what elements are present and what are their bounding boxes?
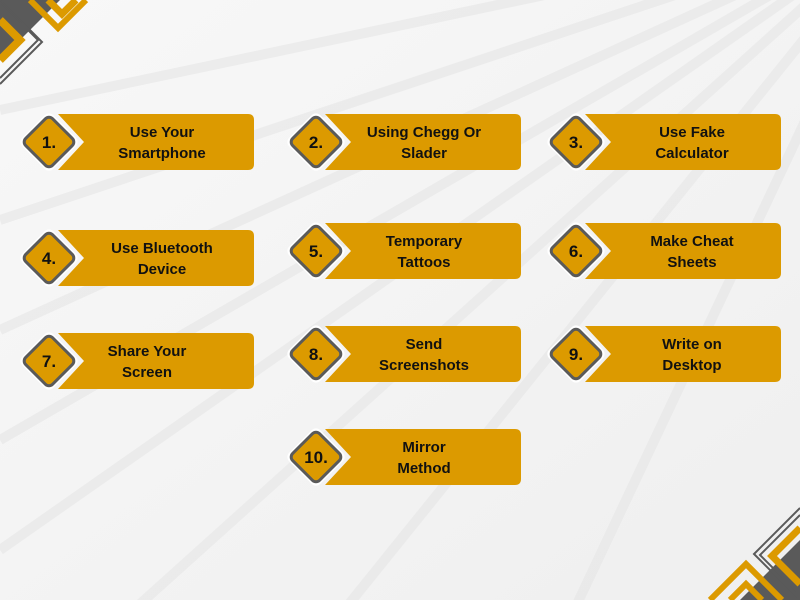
- item 1: [18, 111, 254, 173]
- decoration: bottom-right corner: [710, 508, 800, 600]
- item 9: Write on: [662, 336, 722, 353]
- item 7: [18, 330, 254, 392]
- item 6: Sheets: [667, 254, 717, 271]
- item 2: Using Chegg Or: [367, 124, 481, 141]
- item 1: Use Your: [130, 124, 194, 141]
- item 10: Method: [397, 460, 451, 477]
- item 8: Send: [406, 336, 442, 353]
- item 8: [285, 323, 521, 385]
- item 3: 3.: [569, 133, 583, 152]
- decoration: top-left corner: [0, 0, 86, 84]
- item 4: Device: [138, 261, 186, 278]
- item 5: 5.: [309, 242, 323, 261]
- item 9: Desktop: [662, 357, 722, 374]
- item 7: 7.: [42, 352, 56, 371]
- item 10: [285, 426, 521, 488]
- item 6: [545, 220, 781, 282]
- item 3: Use Fake: [659, 124, 725, 141]
- item 1: Smartphone: [118, 145, 206, 162]
- item 2: [285, 111, 521, 173]
- item 10: 10.: [304, 448, 328, 467]
- item 8: 8.: [309, 345, 323, 364]
- item 9: 9.: [569, 345, 583, 364]
- item 4: Use Bluetooth: [111, 240, 213, 257]
- item 9: [545, 323, 781, 385]
- item 3: Calculator: [655, 145, 729, 162]
- item 8: Screenshots: [379, 357, 469, 374]
- item 6: Make Cheat: [650, 233, 734, 250]
- item 7: Screen: [122, 364, 172, 381]
- item 5: Temporary: [386, 233, 463, 250]
- item 7: Share Your: [108, 343, 186, 360]
- item 5: Tattoos: [397, 254, 451, 271]
- item 3: [545, 111, 781, 173]
- item 10: Mirror: [402, 439, 446, 456]
- item 5: [285, 220, 521, 282]
- item 1: 1.: [42, 133, 56, 152]
- item 2: 2.: [309, 133, 323, 152]
- item 4: 4.: [42, 249, 56, 268]
- item 4: [18, 227, 254, 289]
- item 6: 6.: [569, 242, 583, 261]
- item 2: Slader: [401, 145, 447, 162]
